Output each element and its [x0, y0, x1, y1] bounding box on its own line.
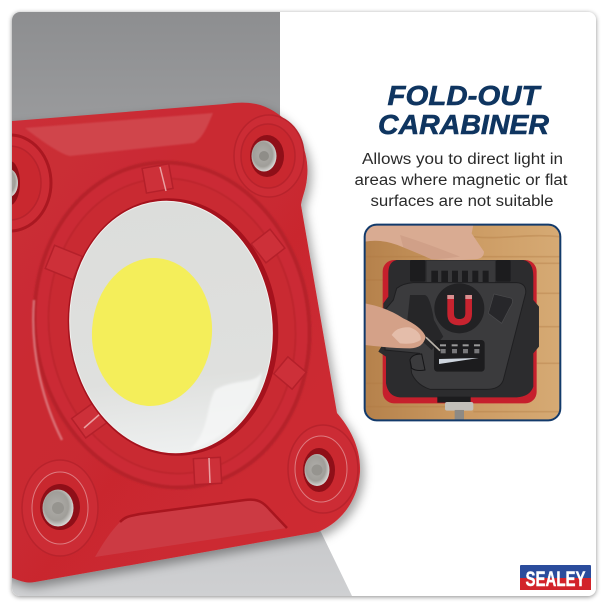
- SEALEY logo: [520, 565, 591, 591]
- lamp body: [0, 103, 360, 583]
- lens diffuser: [69, 200, 273, 454]
- top recessed panel: [25, 113, 213, 156]
- wooden surface: [365, 225, 560, 420]
- magnet badge: [434, 283, 484, 333]
- screw boss: bottom left: [22, 460, 98, 556]
- black carabiner housing: [378, 260, 539, 397]
- description text: [354, 151, 568, 210]
- inset photo: carabiner on the back of the light: [365, 225, 560, 420]
- thin dark rim of lens: [68, 198, 278, 456]
- bottom recessed panel: [95, 500, 287, 557]
- hinge: [410, 260, 511, 283]
- wood grain: [420, 235, 560, 412]
- notch highlights: [84, 167, 210, 483]
- plate cut-out: [407, 295, 443, 350]
- outer ring around lens: [33, 160, 312, 490]
- grey backdrop panel: [12, 12, 352, 596]
- photo border: [365, 225, 560, 420]
- description text: areas where magnetic or flat: [354, 172, 568, 189]
- SEALEY logo: SEALEY: [526, 568, 586, 591]
- thumb holding pin: [365, 303, 426, 348]
- fingers at top: [365, 225, 484, 260]
- tool pin: [426, 337, 440, 351]
- heading: CARABINER: [378, 109, 550, 140]
- red work light product photo: [0, 103, 360, 583]
- heading: FOLD-OUT: [388, 80, 543, 111]
- ring notches: [45, 164, 306, 485]
- screw boss: left: [12, 134, 52, 232]
- description text: Allows you to direct light in: [362, 151, 563, 168]
- heading: [378, 80, 550, 140]
- yellow COB LED: [92, 258, 212, 406]
- percentage indicator panel: [434, 340, 485, 372]
- fold-out carabiner plate: [385, 283, 526, 389]
- red lamp edge: [383, 260, 537, 403]
- tripod screw: [437, 397, 473, 420]
- screw boss: bottom right: [288, 425, 358, 513]
- carabiner tip: [410, 354, 425, 371]
- finger shadow: [400, 235, 460, 259]
- screw boss: top right: [234, 115, 304, 197]
- description text: surfaces are not suitable: [370, 193, 554, 210]
- thumbnail: [392, 327, 421, 344]
- lens highlight: [201, 375, 261, 440]
- left ring highlight: [33, 300, 62, 440]
